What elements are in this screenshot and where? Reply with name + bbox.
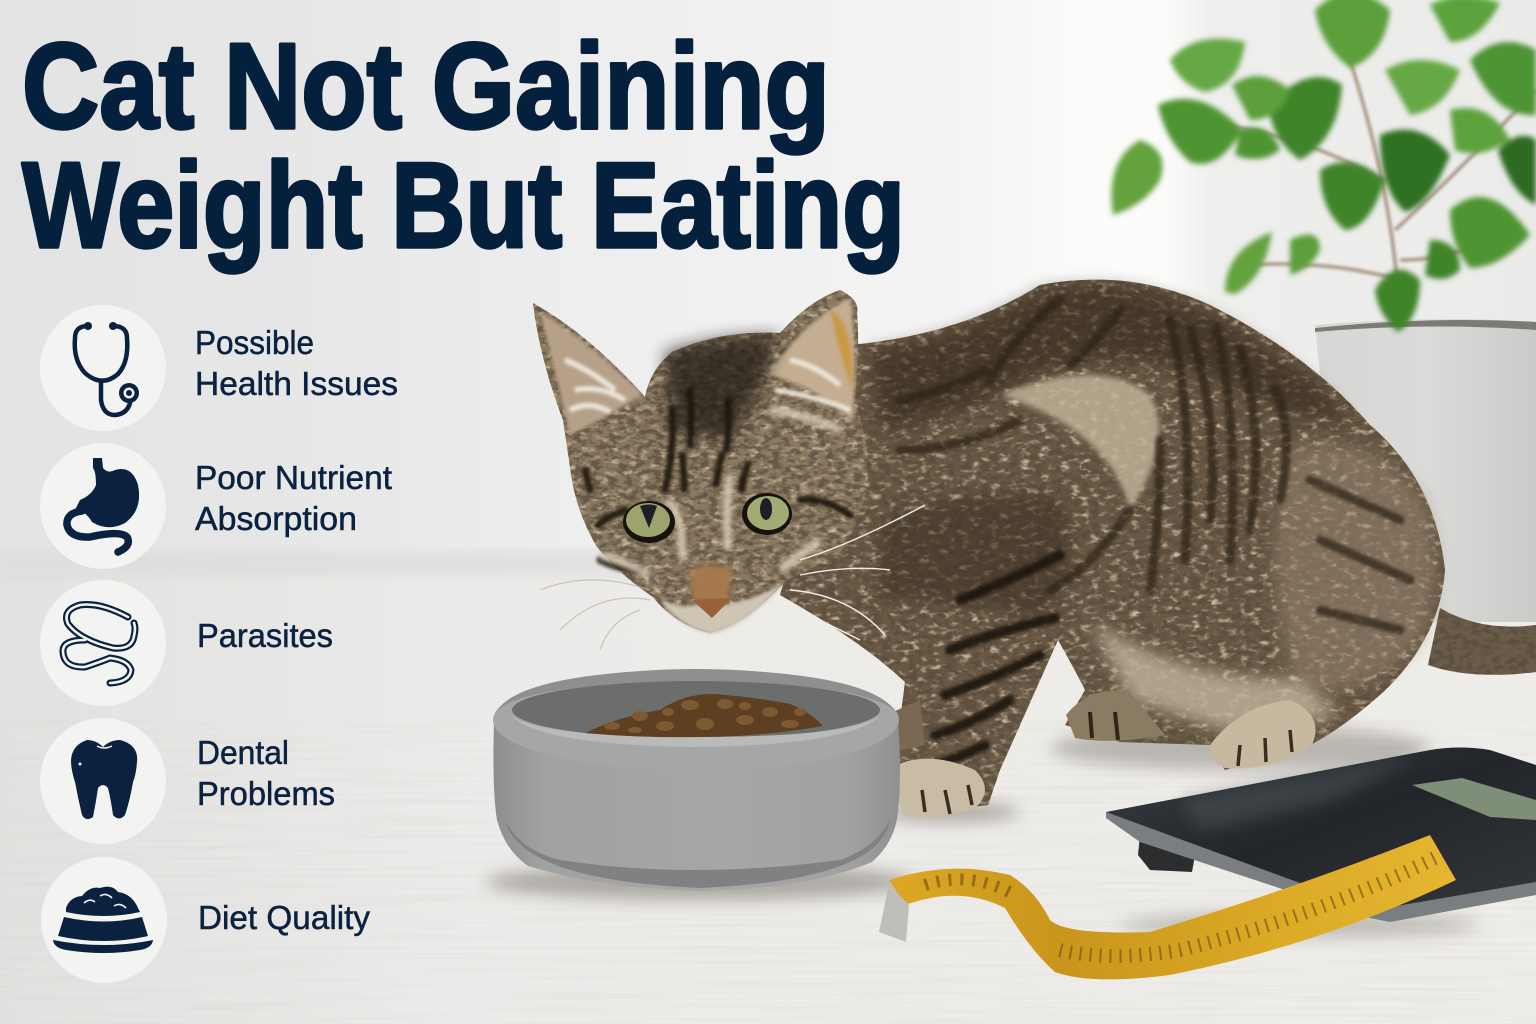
label: poor nutrient absorption: Absorption: [195, 500, 357, 537]
kibble food: [585, 694, 823, 737]
cat front paw: [895, 759, 985, 817]
cat tail: [1428, 608, 1536, 675]
digital scale: [1106, 748, 1536, 922]
label: poor nutrient absorption: Poor Nutrient: [195, 459, 392, 496]
cat nose bridge: [690, 565, 732, 600]
cat ears inner: [540, 298, 855, 435]
cat dark back: [870, 286, 1350, 430]
list item: poor nutrient absorption: [40, 443, 392, 569]
title: [22, 18, 905, 273]
cat haunch: [1275, 444, 1436, 691]
cat nose: [692, 598, 732, 618]
cat muzzle: [660, 582, 785, 634]
label: poor nutrient absorption: [195, 459, 392, 537]
list item: diet quality: [41, 857, 371, 983]
cat whiskers: [780, 505, 925, 640]
label: possible health issues: [195, 324, 398, 402]
cat hidden paw: [893, 700, 925, 752]
label: diet quality: Diet Quality: [198, 899, 371, 936]
cat: [533, 280, 1536, 817]
label: possible health issues: Possible: [195, 324, 314, 361]
label: parasites: Parasites: [197, 617, 333, 654]
icon: stethoscope: [40, 305, 166, 431]
icon: tooth: [40, 718, 166, 844]
food bowl: [493, 669, 900, 891]
title: Cat Not Gaining: [22, 18, 830, 154]
cat forehead dark patch: [665, 335, 778, 440]
cat eyes: [623, 493, 792, 543]
shadows under cat and bowl: [485, 726, 1480, 937]
label: dental problems: Problems: [197, 775, 335, 812]
list item: possible health issues: [40, 305, 398, 431]
icon: stomach: [40, 443, 166, 569]
plant with pot: [1112, 0, 1536, 622]
cat second paw: [1066, 691, 1165, 741]
list item: dental problems: [40, 718, 335, 844]
cat head: [533, 290, 925, 650]
label: dental problems: Dental: [197, 734, 289, 771]
cat forehead stripes: [585, 390, 850, 570]
cat shoulder highlight: [1000, 375, 1159, 510]
cat stripes: [925, 555, 1060, 768]
list item: parasites: [40, 580, 333, 706]
label: dental problems: [197, 734, 335, 812]
icon: worm: [40, 580, 166, 706]
cat face light bands: [600, 410, 840, 575]
title: Weight But Eating: [22, 137, 905, 273]
cat body: [780, 280, 1445, 817]
cat belly: [1090, 620, 1340, 735]
measuring tape: [879, 835, 1456, 979]
icon: food bowl: [41, 857, 167, 983]
cat hind paw: [1210, 700, 1316, 769]
label: possible health issues: Health Issues: [195, 365, 398, 402]
